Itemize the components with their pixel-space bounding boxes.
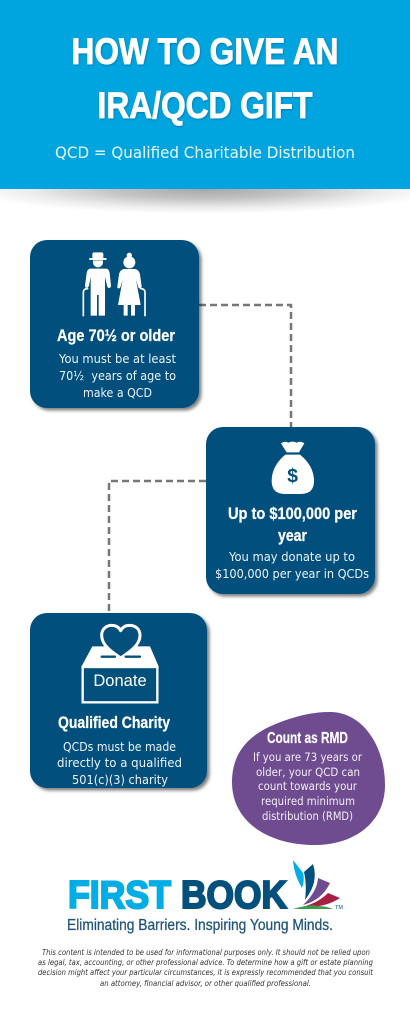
body text: 501(c)(3) charity xyxy=(72,773,168,787)
header banner xyxy=(0,0,410,215)
subtitle: QCD = Qualified Charitable Distribution xyxy=(55,143,355,162)
disclaimer: an attorney, financial advisor, or other qualified professional. xyxy=(100,979,311,988)
icon: money bag: $ xyxy=(287,466,298,487)
body text xyxy=(57,740,182,787)
body text: $100,000 per year in QCDs xyxy=(215,567,369,581)
body text: distribution (RMD) xyxy=(262,810,353,823)
body text: If you are 73 years or xyxy=(253,751,362,764)
wordmark: FIRST xyxy=(68,874,171,917)
panel: qualified charity xyxy=(30,613,207,788)
heading: Up to $100,000 per xyxy=(228,504,357,523)
icon: money bag xyxy=(272,442,314,494)
body text xyxy=(215,550,369,581)
body text xyxy=(58,352,176,400)
panel: donation limit xyxy=(206,427,375,594)
title: HOW TO GIVE AN xyxy=(72,31,338,72)
disclaimer: as legal, tax, accounting, or other professional advice. To determine how a gift or estate planning xyxy=(38,958,373,967)
disclaimer xyxy=(38,948,374,988)
panel: age requirement xyxy=(30,240,199,408)
panel: donation limit: year xyxy=(278,526,307,545)
body text: You must be at least xyxy=(58,352,176,366)
tagline: Eliminating Barriers. Inspiring Young Minds. xyxy=(67,917,333,934)
heading: Count as RMD xyxy=(267,730,348,747)
icon: donation box with heart: Donate xyxy=(93,671,147,690)
icon: book leaves xyxy=(293,860,340,909)
heading: Qualified Charity xyxy=(58,713,170,732)
connector: age card to donation card xyxy=(199,305,291,427)
connector: donation card to charity card xyxy=(109,481,206,613)
logo: First Book xyxy=(67,860,343,934)
body text: directly to a qualified xyxy=(57,756,182,770)
body text: You may donate up to xyxy=(228,550,355,564)
title xyxy=(72,31,338,126)
body text: 70½ years of age to xyxy=(59,369,176,383)
body text xyxy=(253,751,362,823)
logo: First Book: BOOK xyxy=(181,874,287,917)
body text: QCDs must be made xyxy=(63,740,176,754)
heading: Age 70½ or older xyxy=(57,326,175,345)
icon: donation box with heart xyxy=(81,625,159,702)
title: IRA/QCD GIFT xyxy=(98,85,313,126)
icon: elderly couple xyxy=(83,252,145,316)
logo: First Book: TM xyxy=(335,905,343,911)
disclaimer: This content is intended to be used for informational purposes only. It should not be relied upon xyxy=(42,948,370,957)
callout: count as RMD xyxy=(232,712,385,845)
body text: make a QCD xyxy=(83,386,152,400)
body text: count towards your xyxy=(258,780,357,793)
body text: required minimum xyxy=(261,795,355,808)
body text: older, your QCD can xyxy=(256,766,360,779)
